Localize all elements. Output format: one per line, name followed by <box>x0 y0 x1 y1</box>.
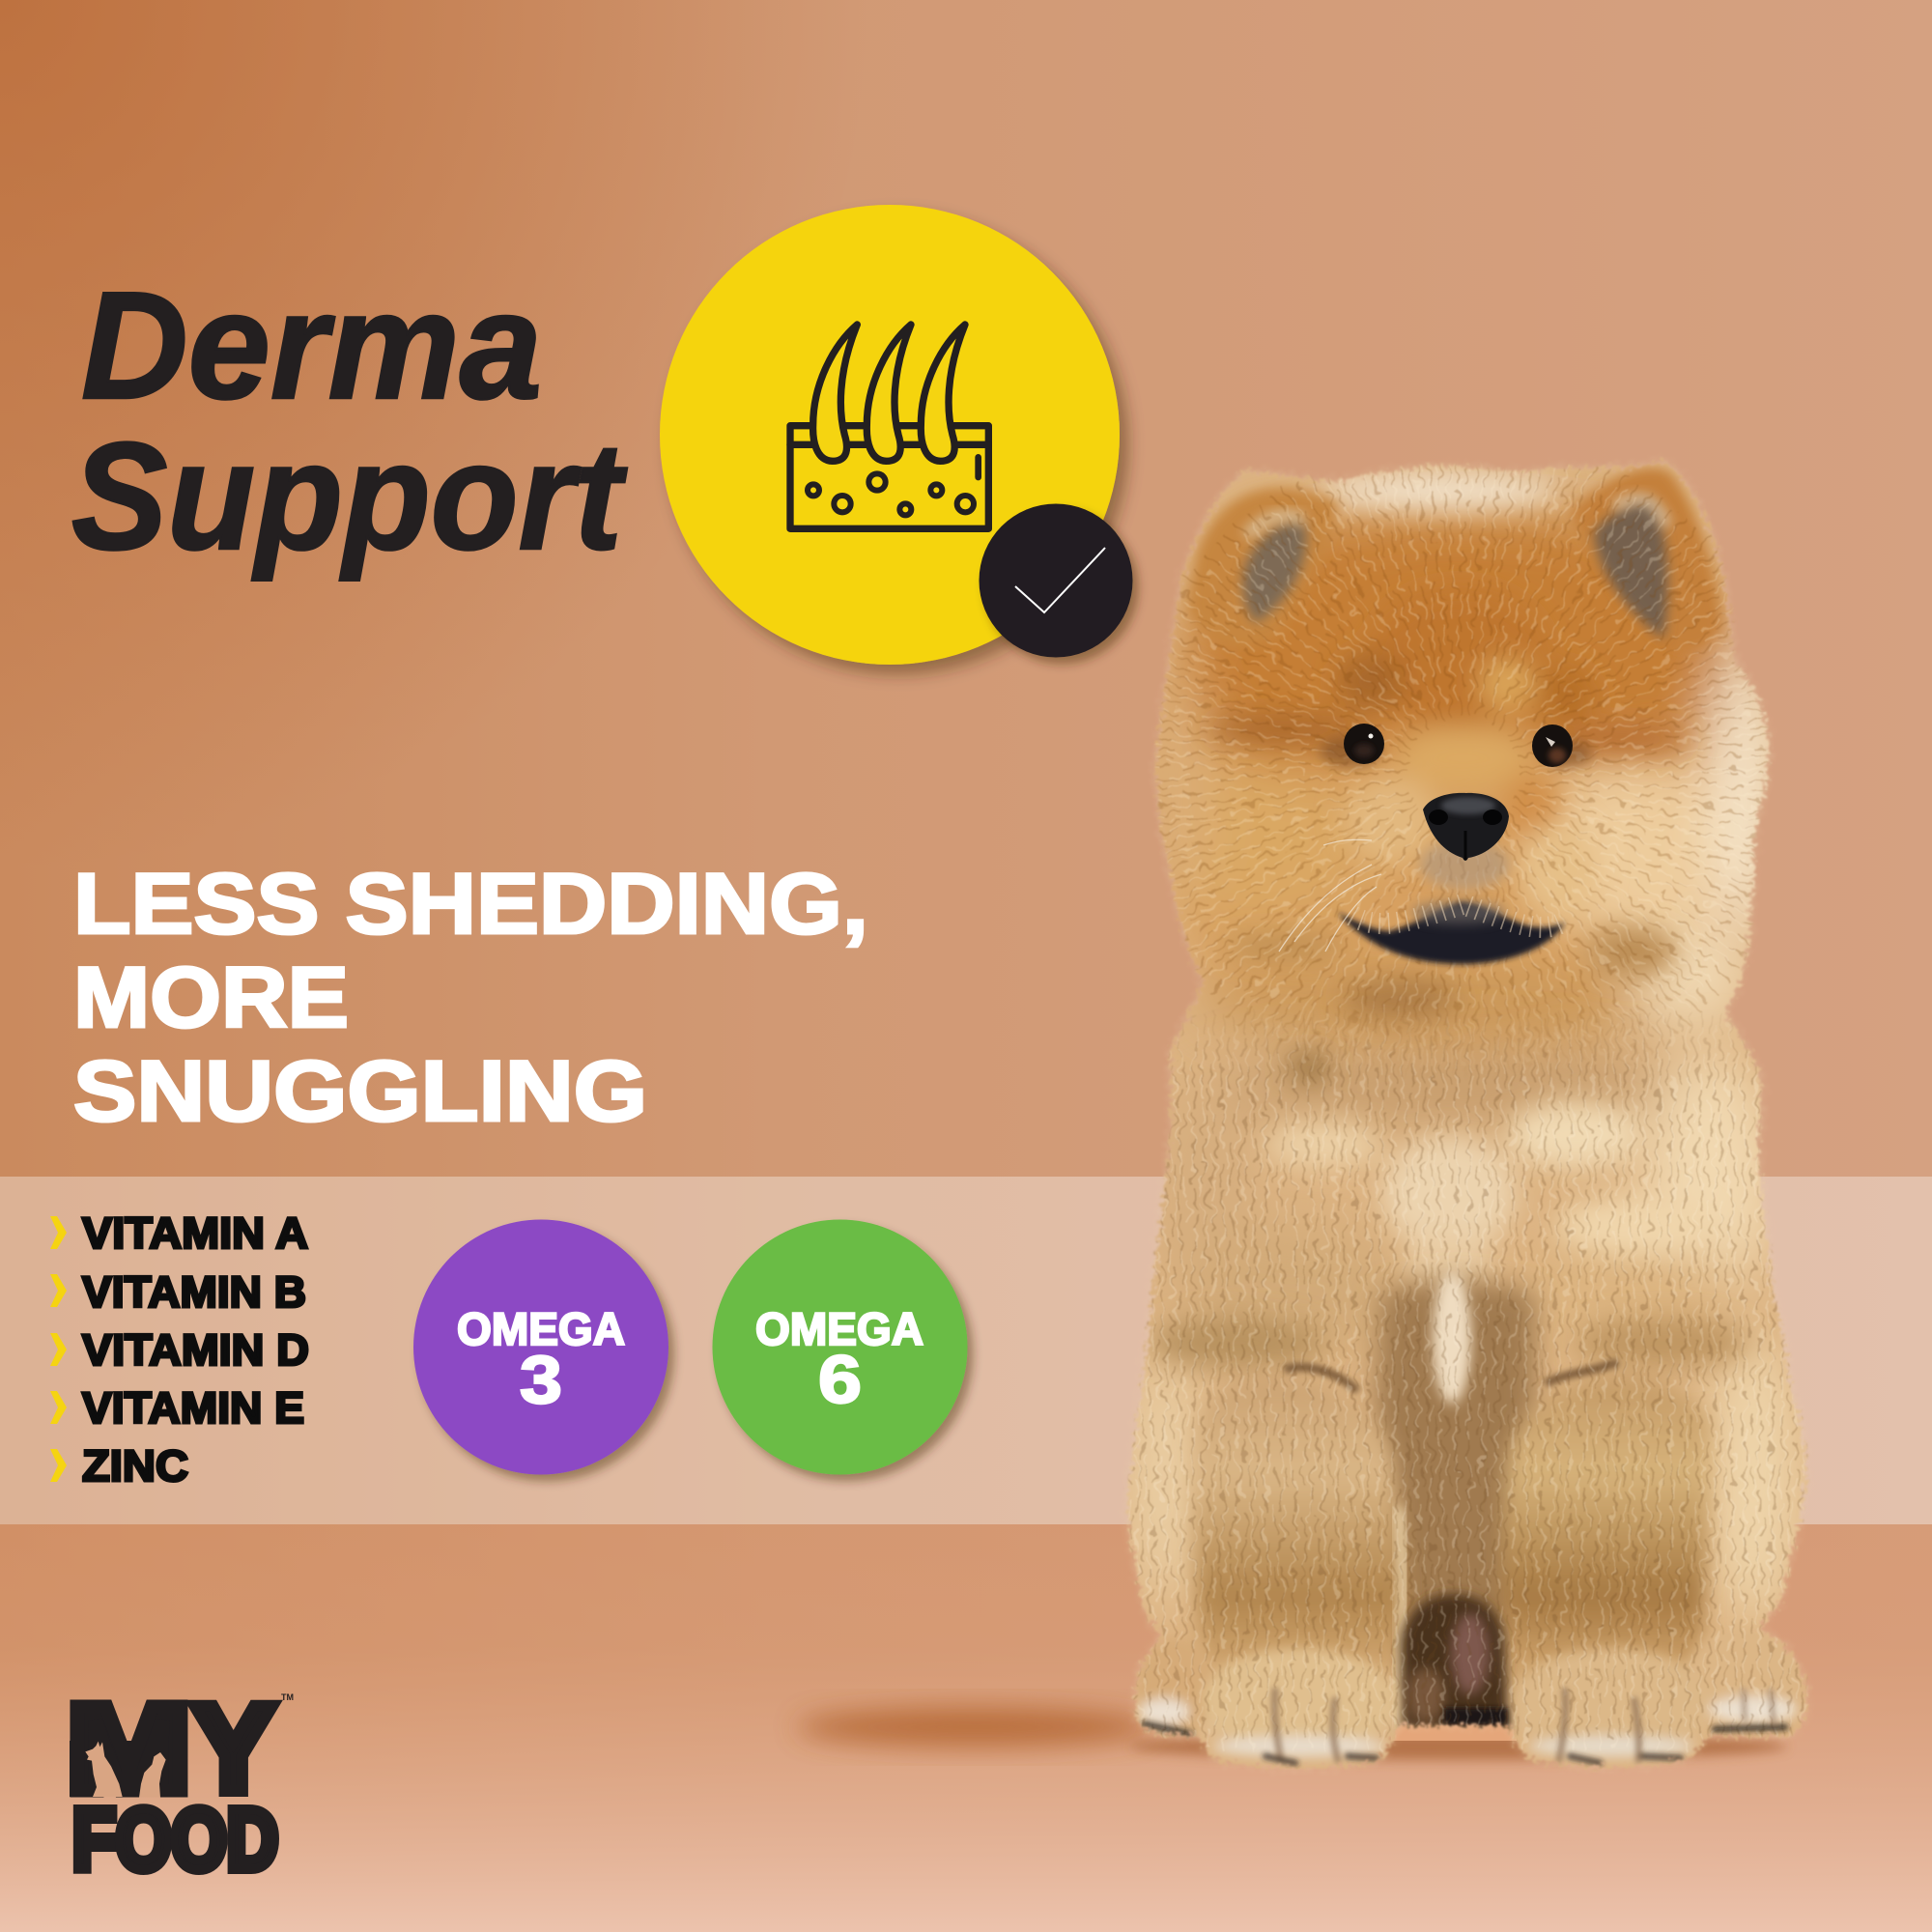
ear: left <box>1188 488 1338 647</box>
headline: LESS SHEDDING, <box>73 855 868 952</box>
check badge <box>980 504 1132 657</box>
badge: omega 3: OMEGA <box>457 1303 625 1354</box>
head colours <box>1130 512 1776 1072</box>
belly centre <box>1372 1280 1536 1633</box>
badge: skin and hair <box>660 205 1132 665</box>
title <box>71 261 628 582</box>
nose <box>1420 793 1509 890</box>
logo: My Food <box>68 1679 294 1889</box>
ingredient list <box>50 1208 309 1491</box>
item markers <box>50 1216 67 1482</box>
fur body <box>1125 458 1810 1770</box>
logo: My Food: TM <box>281 1692 294 1702</box>
leg: left <box>1193 1367 1405 1734</box>
puppy photo <box>1125 458 1811 1770</box>
logo: My Food: Y <box>192 1680 274 1818</box>
soft fur halo <box>1127 461 1807 1768</box>
headline: SNUGGLING <box>73 1042 647 1139</box>
toe shading <box>1145 1690 1787 1764</box>
hair strokes: head <box>1155 465 1772 1053</box>
pet silhouettes <box>85 1742 166 1798</box>
badge: omega 6: OMEGA <box>755 1303 923 1354</box>
yellow circle <box>660 205 1120 665</box>
title: Support <box>71 412 628 582</box>
eye: right <box>1532 724 1592 767</box>
item labels <box>82 1208 309 1491</box>
hair strokes: body <box>1092 1024 1835 1740</box>
whiskers <box>1279 839 1381 952</box>
eye: left <box>1320 724 1384 767</box>
badge: omega 6 <box>713 1219 968 1474</box>
item labels: ZINC <box>82 1441 188 1491</box>
icon: skin with hair follicles <box>790 325 988 528</box>
logo: My Food: FOOD <box>72 1792 278 1889</box>
chest colours <box>1129 1048 1798 1623</box>
logo: My Food: M <box>68 1679 190 1817</box>
headline <box>73 855 868 1139</box>
title: Derma <box>81 261 542 431</box>
leg: right <box>1502 1362 1711 1734</box>
underbelly gap <box>1401 1594 1509 1729</box>
paws <box>1138 1630 1802 1757</box>
mouth <box>1337 902 1565 964</box>
badge: omega 6: 6 <box>818 1342 862 1417</box>
ear: right <box>1570 468 1719 649</box>
badge: omega 3 <box>413 1219 668 1474</box>
headline: MORE <box>73 949 349 1045</box>
item labels: VITAMIN A <box>82 1208 308 1258</box>
translucent ingredients band <box>0 1177 1932 1524</box>
item labels: VITAMIN B <box>82 1267 306 1317</box>
item labels: VITAMIN D <box>82 1325 309 1375</box>
floor shadow <box>797 1708 1787 1760</box>
item labels: VITAMIN E <box>82 1383 304 1433</box>
badge: omega 3: 3 <box>520 1342 562 1417</box>
